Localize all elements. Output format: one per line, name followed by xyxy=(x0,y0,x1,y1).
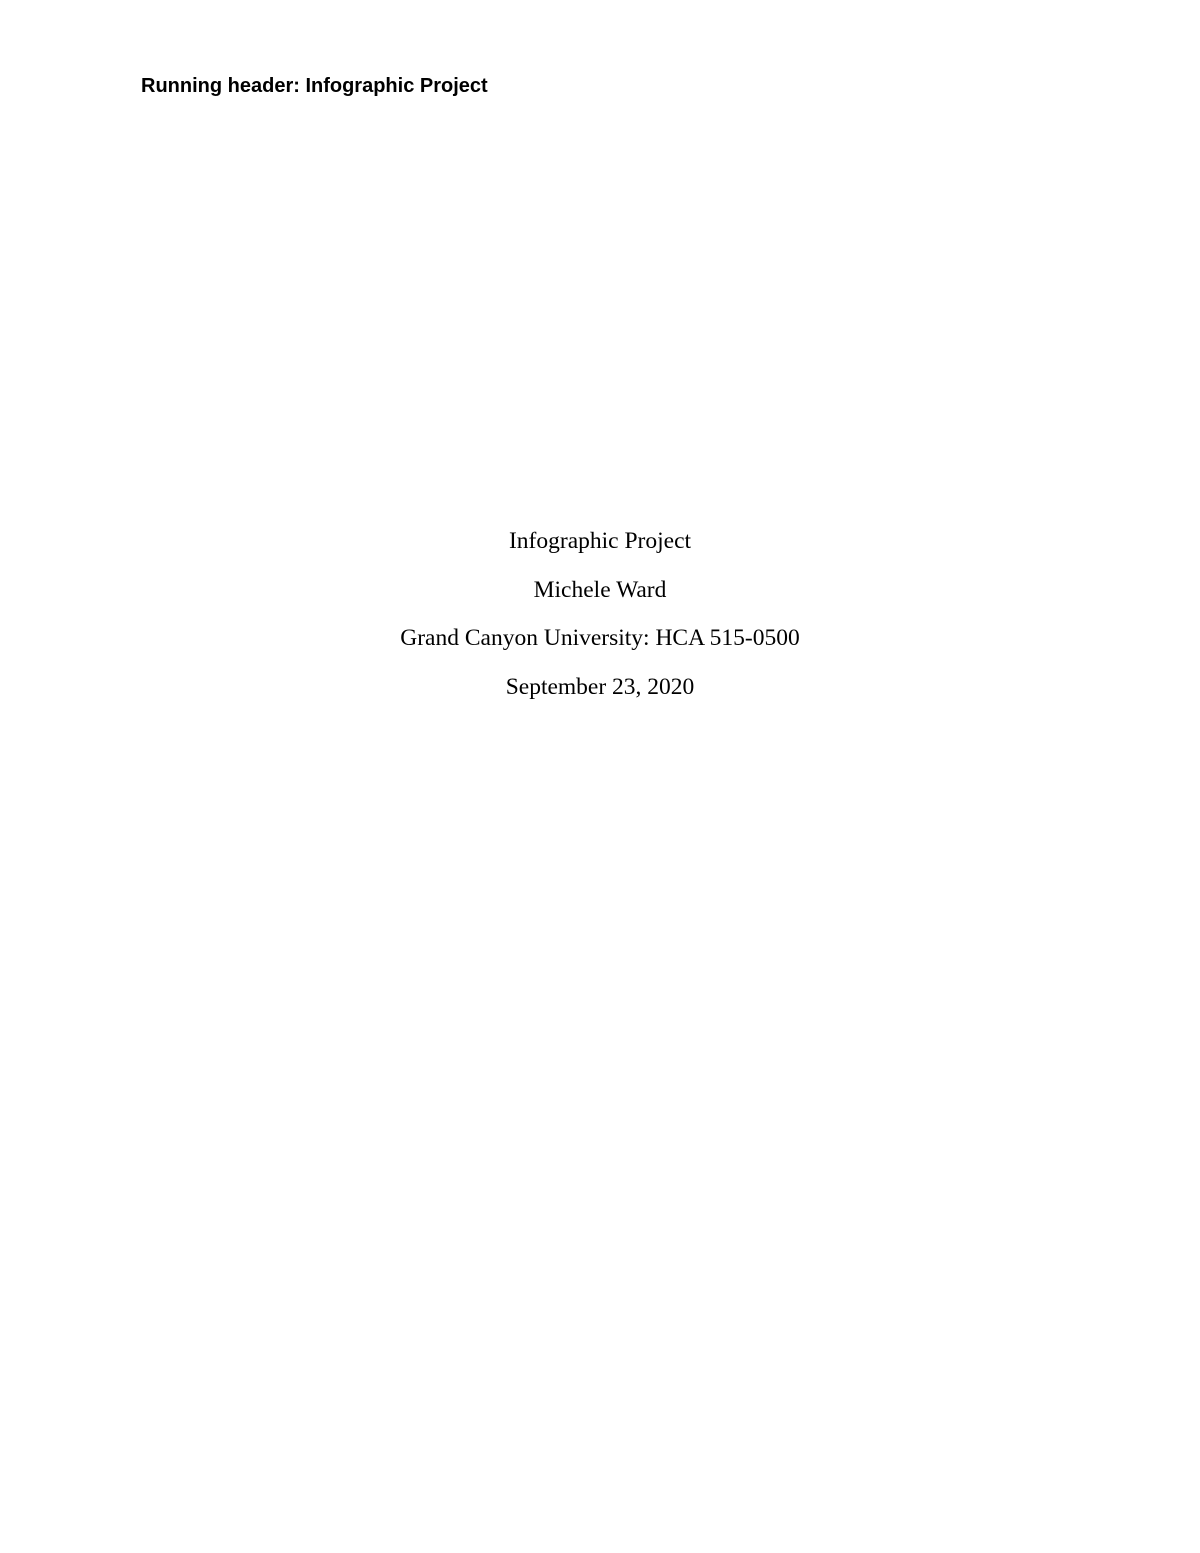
institution: Grand Canyon University: HCA 515-0500 xyxy=(400,625,800,651)
title: Infographic Project xyxy=(509,528,691,554)
date: September 23, 2020 xyxy=(506,674,694,700)
author: Michele Ward xyxy=(534,577,666,603)
title block xyxy=(400,528,800,700)
running header: Running header: Infographic Project xyxy=(141,75,488,97)
